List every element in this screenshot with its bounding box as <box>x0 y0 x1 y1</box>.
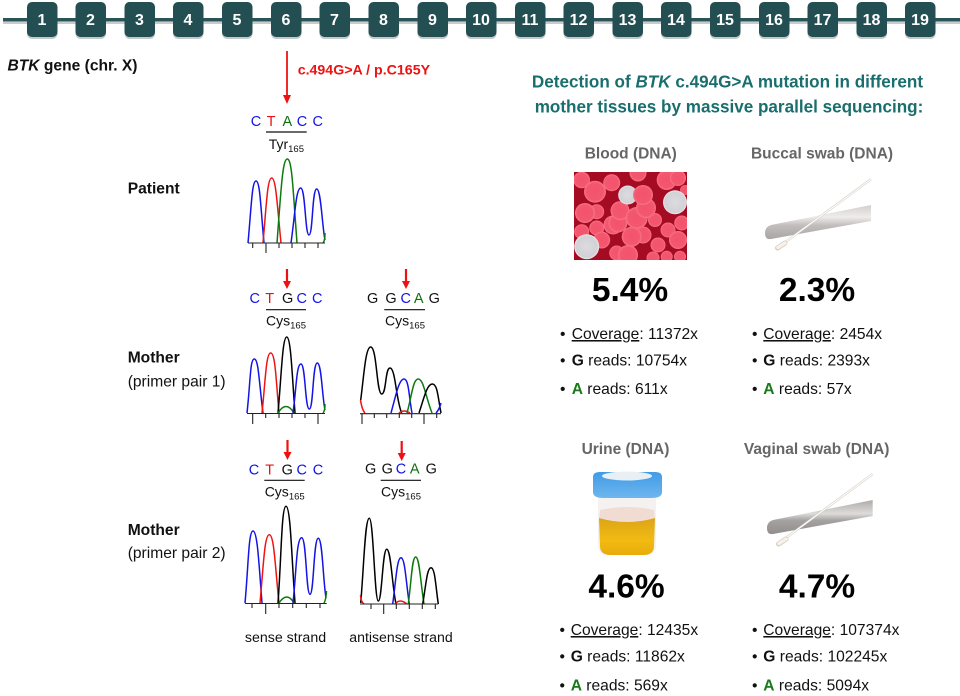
image: vaginal swab <box>767 474 873 544</box>
exon 17 <box>808 2 838 39</box>
patient sequence: C <box>312 114 323 130</box>
exon 12: 12 <box>570 12 588 29</box>
mother pair 1 sense sequence <box>249 291 323 332</box>
stats: blood: • <box>560 326 565 343</box>
row label: mother primer pair 1 <box>128 350 226 390</box>
gene label: BTK gene (chr. X) <box>8 58 137 75</box>
heading: blood: Blood (DNA) <box>585 145 677 162</box>
mother pair 1 antisense chromatogram <box>360 347 441 424</box>
stats: buccal swab: • <box>752 353 757 370</box>
mother pair 1 sense chromatogram <box>247 337 325 424</box>
stats: urine: reads: 11862x <box>587 649 685 666</box>
detection title <box>532 72 923 117</box>
panel: urine <box>560 441 698 694</box>
mother pair 1 sense sequence: T <box>265 291 274 307</box>
stats: urine: • <box>560 649 565 666</box>
stats: buccal swab: • <box>752 381 757 398</box>
patient sequence: 165 <box>288 144 304 155</box>
stats: blood: : 11372x <box>639 326 698 343</box>
mutation arrow <box>283 51 291 104</box>
exon 15: 15 <box>716 12 734 29</box>
mother pair 1 sense sequence: Cys <box>266 312 290 328</box>
detection title: Detection of BTK c.494G>A mutation in different <box>532 72 923 91</box>
strand label: antisense: antisense strand <box>349 629 453 645</box>
mother pair 1 antisense sequence: G <box>385 291 397 307</box>
stats: buccal swab: Coverage <box>763 326 831 343</box>
mother pair 2 sense sequence: 165 <box>289 492 305 503</box>
exon 17: 17 <box>814 12 832 29</box>
stats: urine: • <box>560 678 565 694</box>
value: blood: 5.4% <box>592 272 668 309</box>
mutation label: c.494G>A / p.C165Y <box>298 63 431 79</box>
image: buccal swab <box>765 179 871 248</box>
exon 12 <box>564 2 594 39</box>
stats: blood: Coverage <box>572 326 639 343</box>
strand label: sense: sense strand <box>245 630 326 646</box>
stats: vaginal swab: • <box>752 622 757 639</box>
row label: mother primer pair 2: (primer pair 2) <box>128 545 226 562</box>
mother pair 1 sense sequence: C <box>296 291 307 307</box>
exon 1: 1 <box>38 12 47 29</box>
mother pair 2 antisense sequence: G <box>426 462 437 478</box>
mother pair 2 antisense sequence <box>365 462 437 503</box>
mother pair 2 sense chromatogram <box>245 506 327 614</box>
exon 1 <box>27 2 58 39</box>
stats: vaginal swab: G <box>763 649 775 666</box>
exon 6 <box>271 2 302 39</box>
mother pair 1 sense sequence: 165 <box>290 320 306 332</box>
stats: buccal swab: reads: 57x <box>779 381 852 398</box>
mother pair 1 antisense sequence: C <box>400 291 411 307</box>
patient sequence: A <box>282 114 292 130</box>
row label: mother primer pair 1: Mother <box>128 350 180 366</box>
mother pair 2 sense sequence <box>249 462 323 503</box>
stats: urine: G <box>571 649 583 666</box>
stats: vaginal swab: Coverage <box>763 622 831 639</box>
stats: vaginal swab: reads: 5094x <box>779 678 869 694</box>
exon 6: 6 <box>282 12 291 29</box>
mother pair 1 antisense sequence: A <box>414 291 424 307</box>
mother pair 2 antisense arrow <box>398 441 406 461</box>
exon 14: 14 <box>667 12 685 29</box>
stats: vaginal swab: reads: 102245x <box>780 649 887 666</box>
gene exon track <box>3 2 960 39</box>
heading: vaginal swab: Vaginal swab (DNA) <box>744 441 889 458</box>
exon 11: 11 <box>522 12 539 29</box>
mother pair 1 antisense sequence <box>367 291 440 332</box>
exon 16 <box>759 2 790 39</box>
exon 2: 2 <box>86 12 95 29</box>
exon 9: 9 <box>428 12 437 29</box>
stats: buccal swab: : 2454x <box>831 326 882 343</box>
row label: mother primer pair 2: Mother <box>128 522 180 539</box>
patient chromatogram <box>248 159 325 253</box>
image: blood cells <box>574 172 687 260</box>
mother pair 2 sense arrow <box>284 440 292 460</box>
mother pair 1 antisense sequence: G <box>429 291 440 307</box>
row label: mother primer pair 2 <box>128 522 226 562</box>
stats: blood: reads: 10754x <box>588 353 687 370</box>
stats: blood: reads: 611x <box>587 381 668 398</box>
exon 2 <box>76 2 106 39</box>
patient sequence: C <box>251 114 261 130</box>
mother pair 2 sense sequence: C <box>249 462 259 478</box>
heading: urine: Urine (DNA) <box>582 441 669 458</box>
exon 8: 8 <box>379 12 388 29</box>
mother pair 1 sense sequence: C <box>312 291 323 307</box>
mother pair 2 antisense chromatogram <box>360 518 438 614</box>
patient sequence: C <box>297 114 307 130</box>
exon 3 <box>124 2 155 39</box>
exon 5: 5 <box>233 12 242 29</box>
patient sequence: T <box>267 114 276 130</box>
mother pair 2 antisense sequence: G <box>382 462 393 478</box>
exon 14 <box>661 2 692 39</box>
row label: mother primer pair 1: (primer pair 1) <box>128 374 226 390</box>
mother pair 1 antisense sequence: Cys <box>385 312 409 328</box>
row label: patient: Patient <box>128 180 180 197</box>
exon 3: 3 <box>135 12 144 29</box>
stats: blood <box>560 326 698 398</box>
value: vaginal swab: 4.7% <box>779 568 855 605</box>
patient sequence: Tyr <box>269 136 288 152</box>
exon 13 <box>612 2 643 39</box>
exon 18 <box>856 2 887 39</box>
exon 15 <box>710 2 740 39</box>
mother pair 1 antisense arrow <box>402 269 410 289</box>
mother pair 2 sense sequence: G <box>282 462 293 478</box>
stats: blood: A <box>572 381 583 398</box>
stats: urine <box>560 622 698 694</box>
value: urine: 4.6% <box>588 568 665 605</box>
exon 19: 19 <box>911 12 929 29</box>
exon 4 <box>173 2 204 39</box>
stats: buccal swab: • <box>752 326 757 343</box>
exon 16: 16 <box>765 12 783 29</box>
mother pair 2 sense sequence: C <box>296 462 307 478</box>
mother pair 2 antisense sequence: 165 <box>405 492 421 503</box>
stats: vaginal swab: A <box>763 678 775 694</box>
stats: urine: : 12435x <box>638 622 698 639</box>
exon 7 <box>320 2 350 39</box>
patient sequence <box>251 114 323 155</box>
exon 9 <box>418 2 448 39</box>
stats: blood: • <box>560 381 565 398</box>
panel: buccal swab <box>751 145 893 398</box>
value: buccal swab: 2.3% <box>779 272 855 309</box>
mother pair 1 antisense sequence: G <box>367 291 378 307</box>
stats: blood: G <box>572 353 584 370</box>
exon 19 <box>905 2 936 39</box>
stats: vaginal swab: • <box>752 678 757 694</box>
mother pair 1 sense sequence: C <box>249 291 260 307</box>
mother pair 2 sense sequence: Cys <box>265 484 289 500</box>
mother pair 2 antisense sequence: C <box>396 462 406 478</box>
panel: blood <box>560 145 698 398</box>
exon 7: 7 <box>330 12 339 29</box>
mother pair 2 antisense sequence: G <box>365 462 376 478</box>
stats: vaginal swab: : 107374x <box>831 622 899 639</box>
stats: buccal swab: G <box>763 353 775 370</box>
stats: buccal swab: A <box>763 381 775 398</box>
exon 4: 4 <box>184 12 193 29</box>
mother pair 1 antisense sequence: 165 <box>409 320 425 332</box>
stats: buccal swab: reads: 2393x <box>780 353 870 370</box>
stats: blood: • <box>560 353 565 370</box>
exon 13: 13 <box>619 12 636 29</box>
stats: buccal swab <box>752 326 882 398</box>
exon 5 <box>222 2 252 39</box>
stats: vaginal swab: • <box>752 649 757 666</box>
heading: buccal swab: Buccal swab (DNA) <box>751 145 893 162</box>
mother pair 2 antisense sequence: Cys <box>381 484 405 500</box>
image: urine cup <box>593 472 662 555</box>
panel: vaginal swab <box>744 441 900 694</box>
exon 10 <box>466 2 496 39</box>
stats: urine: reads: 569x <box>586 678 668 694</box>
mother pair 2 antisense sequence: A <box>410 462 420 478</box>
stats: urine: A <box>571 678 582 694</box>
exon 8 <box>368 2 399 39</box>
stats: urine: • <box>560 622 565 639</box>
exon 18: 18 <box>863 12 880 29</box>
stats: vaginal swab <box>752 622 900 694</box>
exon 10: 10 <box>472 12 490 29</box>
mother pair 1 sense arrow <box>283 269 291 289</box>
detection title: mother tissues by massive parallel sequencing: <box>535 98 923 117</box>
mother pair 2 sense sequence: T <box>265 462 274 478</box>
exon 11 <box>515 2 546 39</box>
mother pair 1 sense sequence: G <box>282 291 293 307</box>
stats: urine: Coverage <box>571 622 638 639</box>
mother pair 2 sense sequence: C <box>313 462 323 478</box>
